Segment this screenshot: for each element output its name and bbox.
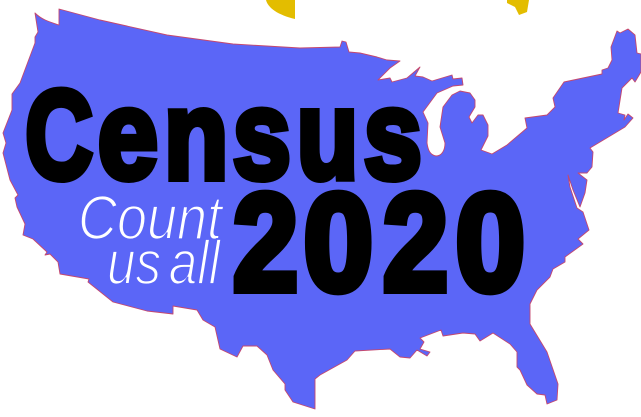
tagline: Count us all: Count <box>78 184 224 253</box>
heading: Census: s <box>364 64 422 206</box>
icon: yellow shape left <box>266 0 295 19</box>
heading: 2020: 2 <box>383 166 448 320</box>
heading: Census <box>25 64 422 206</box>
heading: 2020: 0 <box>456 165 525 319</box>
heading: Census: n <box>164 65 228 206</box>
heading: 2020 <box>233 165 525 320</box>
heading: Census: C <box>25 64 93 206</box>
tagline: Count us all <box>78 184 224 298</box>
heading: 2020: 0 <box>304 165 373 319</box>
tagline: Count us all: us all <box>107 229 222 298</box>
icon: yellow shape right <box>507 0 529 15</box>
heading: 2020: 2 <box>233 166 298 320</box>
heading: Census: e <box>98 65 158 205</box>
heading: Census: u <box>297 66 358 206</box>
heading: Census: s <box>233 64 291 206</box>
